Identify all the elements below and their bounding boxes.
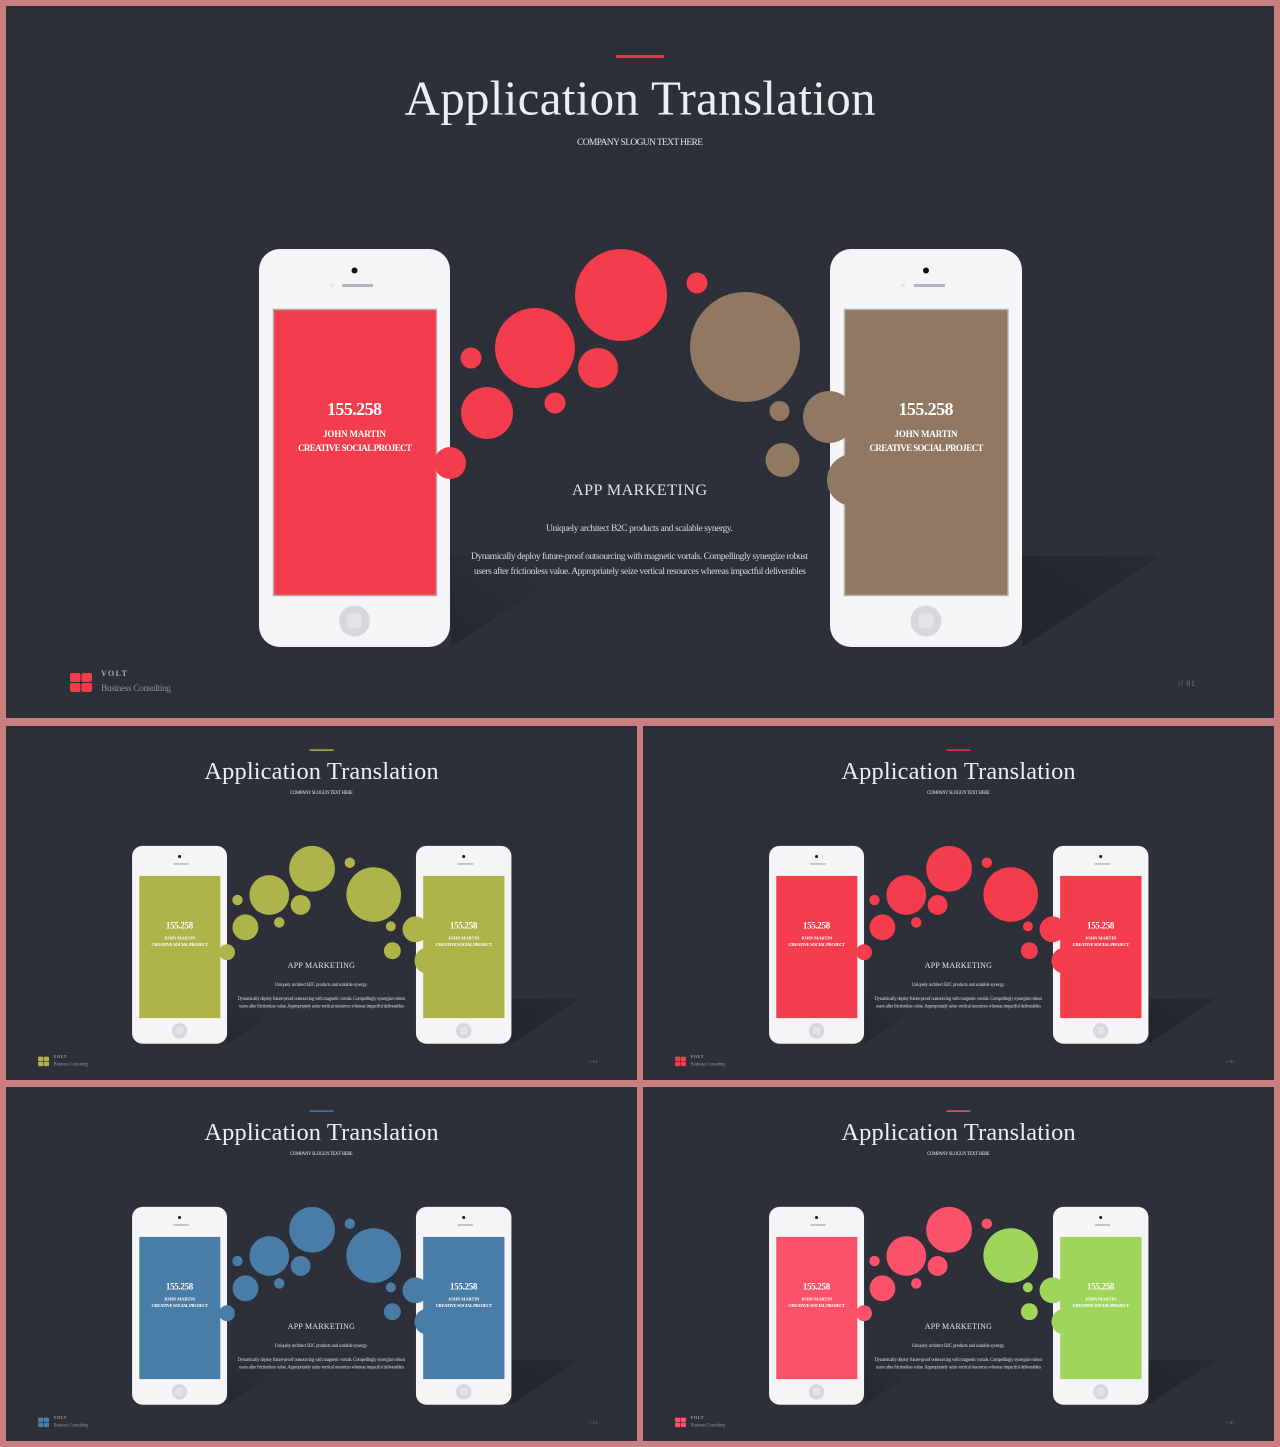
center text block: Dynamically deploy future-proof outsourcing with magnetic vortals. Compellingly synergize robust xyxy=(237,997,406,1002)
phone left xyxy=(769,846,864,1044)
center text block: Uniquely architect B2C products and scalable synergy. xyxy=(546,524,733,534)
center text block: Uniquely architect B2C products and scalable synergy. xyxy=(275,1344,368,1349)
bubbles right xyxy=(983,867,1077,974)
logo: Business Consulting xyxy=(54,1424,89,1429)
right phone label: CREATIVE SOCIAL PROJECT xyxy=(1073,1303,1129,1308)
accent line xyxy=(310,749,333,751)
left phone label: JOHN MARTIN xyxy=(323,429,386,439)
accent line xyxy=(616,55,664,58)
phone shadow left xyxy=(228,1359,296,1405)
right phone label: JOHN MARTIN xyxy=(448,1296,480,1301)
logo xyxy=(38,1415,89,1429)
phone shadow left xyxy=(865,998,933,1044)
panel: pink and green slide xyxy=(643,1087,1274,1441)
right phone label: 155.258 xyxy=(1087,920,1115,930)
title: Application Translation xyxy=(204,1119,439,1146)
phone shadow right xyxy=(1022,556,1160,647)
center text block: APP MARKETING xyxy=(925,961,992,970)
center text block: APP MARKETING xyxy=(288,1322,355,1331)
center text block xyxy=(874,961,1043,1009)
logo xyxy=(675,1054,726,1068)
right phone label xyxy=(1073,920,1129,947)
logo: Business Consulting xyxy=(54,1063,89,1068)
right phone label: 155.258 xyxy=(450,920,478,930)
panel: blue slide xyxy=(6,1087,637,1441)
center text block: APP MARKETING xyxy=(288,961,355,970)
phone left xyxy=(769,1207,864,1405)
phone right xyxy=(416,1207,511,1405)
title: Application Translation xyxy=(841,1119,1076,1146)
left phone label: JOHN MARTIN xyxy=(801,935,833,940)
bubbles left xyxy=(434,249,708,479)
right phone label xyxy=(870,399,984,453)
phone shadow left xyxy=(865,1359,933,1405)
center text block xyxy=(237,961,406,1009)
left phone label: CREATIVE SOCIAL PROJECT xyxy=(788,942,845,947)
right phone label: 155.258 xyxy=(450,1281,478,1291)
right phone label: JOHN MARTIN xyxy=(1085,1296,1117,1301)
right phone label: 155.258 xyxy=(898,399,954,419)
left phone label: 155.258 xyxy=(166,1281,194,1291)
left phone label xyxy=(151,920,208,947)
page number: // 01 xyxy=(1178,679,1195,688)
center text block xyxy=(471,482,808,577)
accent line xyxy=(947,749,970,751)
slogan: COMPANY SLOGUN TEXT HERE xyxy=(577,138,703,148)
center text block xyxy=(874,1322,1043,1370)
phone right xyxy=(830,249,1022,647)
phone shadow left xyxy=(228,998,296,1044)
left phone label xyxy=(788,1281,845,1308)
right phone label: JOHN MARTIN xyxy=(448,935,480,940)
right phone label: JOHN MARTIN xyxy=(894,429,958,439)
phone left xyxy=(132,846,227,1044)
center text block: Dynamically deploy future-proof outsourcing with magnetic vortals. Compellingly synergize robust xyxy=(874,1358,1043,1363)
accent line xyxy=(947,1110,970,1112)
center text block: users after frictionless value. Appropriately seize vertical resources whereas impactful deliverables xyxy=(239,1365,404,1370)
panel: main slide, red and brown xyxy=(6,6,1274,718)
bubbles right xyxy=(983,1228,1077,1335)
slogan: COMPANY SLOGUN TEXT HERE xyxy=(290,791,353,796)
bubbles right xyxy=(690,292,879,506)
phone shadow left xyxy=(451,556,589,647)
right phone label xyxy=(436,920,492,947)
title: Application Translation xyxy=(204,758,439,785)
title: Application Translation xyxy=(841,758,1076,785)
logo: Business Consulting xyxy=(691,1063,726,1068)
logo: VOLT xyxy=(54,1415,67,1420)
center text block: Uniquely architect B2C products and scalable synergy. xyxy=(275,983,368,988)
left phone label: 155.258 xyxy=(803,1281,831,1291)
left phone label xyxy=(298,399,412,453)
left phone label: JOHN MARTIN xyxy=(801,1296,833,1301)
bubbles left xyxy=(219,1207,355,1321)
left phone label: 155.258 xyxy=(327,399,382,419)
left phone label: CREATIVE SOCIAL PROJECT xyxy=(788,1303,845,1308)
phone shadow right xyxy=(511,1359,580,1405)
phone left xyxy=(259,249,450,647)
left phone label: JOHN MARTIN xyxy=(164,1296,196,1301)
right phone label: CREATIVE SOCIAL PROJECT xyxy=(436,1303,492,1308)
phone left xyxy=(132,1207,227,1405)
logo: VOLT xyxy=(691,1415,704,1420)
right phone label: CREATIVE SOCIAL PROJECT xyxy=(870,443,984,453)
left phone label: CREATIVE SOCIAL PROJECT xyxy=(151,1303,208,1308)
logo xyxy=(70,669,171,694)
left phone label: CREATIVE SOCIAL PROJECT xyxy=(151,942,208,947)
center text block: Uniquely architect B2C products and scalable synergy. xyxy=(912,983,1005,988)
left phone label xyxy=(151,1281,208,1308)
right phone label xyxy=(436,1281,492,1308)
phone shadow right xyxy=(1148,998,1217,1044)
center text block: Dynamically deploy future-proof outsourcing with magnetic vortals. Compellingly synergize robust xyxy=(237,1358,406,1363)
right phone label: 155.258 xyxy=(1087,1281,1115,1291)
center text block xyxy=(237,1322,406,1370)
center text block: Dynamically deploy future-proof outsourcing with magnetic vortals. Compellingly synergize robust xyxy=(471,551,808,562)
bubbles right xyxy=(346,1228,440,1335)
right phone label xyxy=(1073,1281,1129,1308)
left phone label: JOHN MARTIN xyxy=(164,935,196,940)
page number: // 01 xyxy=(1226,1420,1234,1425)
center text block: APP MARKETING xyxy=(572,482,707,499)
left phone label xyxy=(788,920,845,947)
accent line xyxy=(310,1110,333,1112)
right phone label: JOHN MARTIN xyxy=(1085,935,1117,940)
slogan: COMPANY SLOGUN TEXT HERE xyxy=(290,1152,353,1157)
center text block: APP MARKETING xyxy=(925,1322,992,1331)
page number: // 01 xyxy=(1226,1059,1234,1064)
right phone label: CREATIVE SOCIAL PROJECT xyxy=(1073,942,1129,947)
title: Application Translation xyxy=(404,70,876,126)
center text block: users after frictionless value. Appropriately seize vertical resources whereas impactful deliverables xyxy=(876,1365,1041,1370)
center text block: Uniquely architect B2C products and scalable synergy. xyxy=(912,1344,1005,1349)
bubbles right xyxy=(346,867,440,974)
phone right xyxy=(1053,1207,1148,1405)
slogan: COMPANY SLOGUN TEXT HERE xyxy=(927,791,990,796)
panel: red slide xyxy=(643,726,1274,1080)
slogan: COMPANY SLOGUN TEXT HERE xyxy=(927,1152,990,1157)
logo: VOLT xyxy=(54,1054,67,1059)
logo: Business Consulting xyxy=(691,1424,726,1429)
logo xyxy=(675,1415,726,1429)
logo: Business Consulting xyxy=(101,684,171,694)
phone right xyxy=(416,846,511,1044)
phone shadow right xyxy=(1148,1359,1217,1405)
phone right xyxy=(1053,846,1148,1044)
right phone label: CREATIVE SOCIAL PROJECT xyxy=(436,942,492,947)
bubbles left xyxy=(219,846,355,960)
center text block: users after frictionless value. Appropriately seize vertical resources whereas impactful deliverables xyxy=(239,1004,404,1009)
page number: // 01 xyxy=(589,1420,597,1425)
center text block: users after frictionless value. Appropriately seize vertical resources whereas impactful deliverables xyxy=(876,1004,1041,1009)
center text block: Dynamically deploy future-proof outsourcing with magnetic vortals. Compellingly synergize robust xyxy=(874,997,1043,1002)
left phone label: 155.258 xyxy=(166,920,194,930)
left phone label: 155.258 xyxy=(803,920,831,930)
page number: // 01 xyxy=(589,1059,597,1064)
center text block: users after frictionless value. Appropriately seize vertical resources whereas impactful deliverables xyxy=(474,566,806,577)
logo: VOLT xyxy=(101,669,128,678)
bubbles left xyxy=(856,846,992,960)
panel: olive slide xyxy=(6,726,637,1080)
left phone label: CREATIVE SOCIAL PROJECT xyxy=(298,443,412,453)
logo: VOLT xyxy=(691,1054,704,1059)
phone shadow right xyxy=(511,998,580,1044)
bubbles left xyxy=(856,1207,992,1321)
logo xyxy=(38,1054,89,1068)
